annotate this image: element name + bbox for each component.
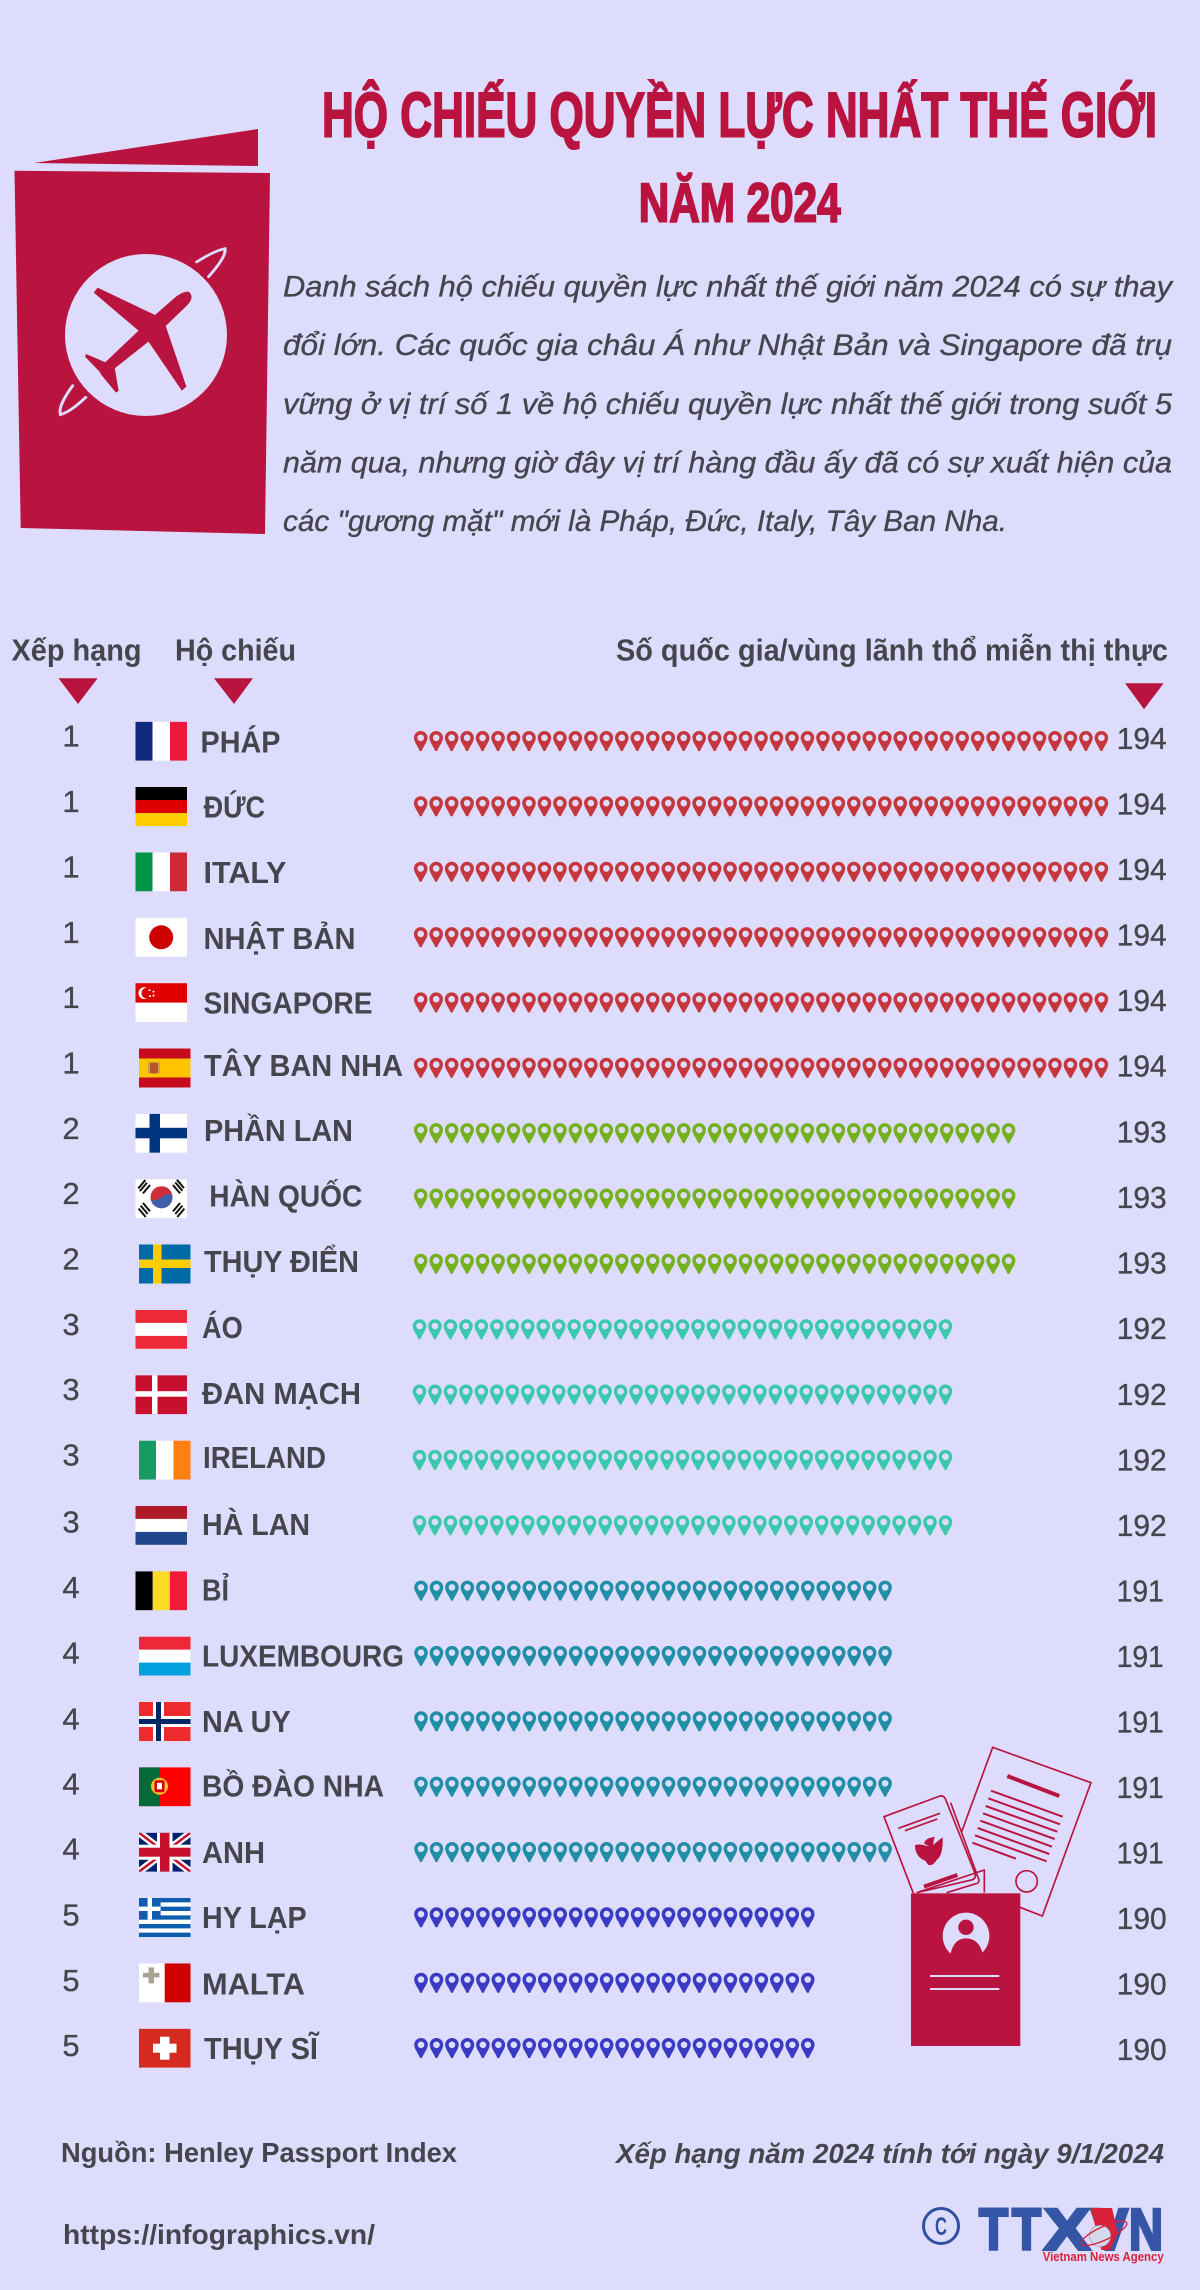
row: Nhật Bản: 194 [1117, 918, 1167, 952]
row: Luxembourg [62, 1636, 1164, 1676]
row: Nhật Bản: NHẬT BẢN [204, 920, 356, 956]
row: Anh: 4 [62, 1832, 80, 1867]
row: Ireland: 192 [1117, 1442, 1167, 1478]
row: Thụy Sĩ [62, 2028, 1167, 2068]
row: Bồ Đào Nha: 191 [1117, 1770, 1164, 1805]
row: Áo [62, 1307, 1167, 1349]
row: Malta: 190 [1117, 1966, 1167, 2002]
row: Pháp: PHÁP [200, 725, 280, 760]
row: Thụy Điển [62, 1242, 1167, 1284]
row: Anh: 191 [1117, 1836, 1164, 1870]
icon: passport with airplane [14, 129, 270, 534]
row: Đức: ĐỨC [204, 789, 265, 825]
row: Thụy Điển: 2 [62, 1242, 80, 1276]
row: Thụy Điển: 193 [1117, 1246, 1167, 1280]
row: Hà Lan: 192 [1117, 1508, 1167, 1543]
row: Hy Lạp: 5 [62, 1898, 80, 1933]
row: Italy: 194 [1117, 852, 1167, 887]
row: Áo: ÁO [202, 1310, 243, 1345]
row: Hà Lan: HÀ LAN [202, 1507, 310, 1542]
intro paragraph: các "gương mặt" mới là Pháp, Đức, Italy, Tây Ban Nha. [283, 505, 1007, 538]
table header: rank [12, 633, 142, 704]
row: Na Uy [62, 1702, 1164, 1741]
row: Phần Lan: PHẦN LAN [204, 1113, 353, 1148]
row: Thụy Sĩ: THỤY SĨ [204, 2031, 320, 2066]
row: Luxembourg: 191 [1117, 1639, 1164, 1674]
row: Phần Lan: 193 [1117, 1114, 1167, 1150]
row: Malta [62, 1963, 1167, 2002]
row: Đức: 1 [62, 784, 80, 819]
illustration: passports and documents [884, 1747, 1091, 2046]
copyright symbol [924, 2208, 958, 2244]
row: Pháp: 1 [62, 719, 80, 754]
intro paragraph: năm qua, nhưng giờ đây vị trí hàng đầu ấy đã có sự xuất hiện của [283, 447, 1172, 480]
row: Bỉ: BỈ [202, 1573, 229, 1608]
row: Tây Ban Nha [62, 1046, 1167, 1088]
row: Na Uy: NA UY [202, 1704, 291, 1739]
row: Singapore: 194 [1117, 983, 1167, 1018]
subtitle: NĂM 2024 [639, 172, 841, 234]
logo: TTXVN [979, 2198, 1164, 2264]
logo: TTXVN: Vietnam News Agency [1043, 2249, 1164, 2264]
row: Bồ Đào Nha: 4 [62, 1767, 80, 1802]
row: Đan Mạch: 3 [62, 1372, 80, 1407]
row: Anh: ANH [202, 1835, 265, 1870]
copyright symbol: C [935, 2213, 947, 2241]
row: Nhật Bản [62, 915, 1167, 957]
row: Đức [62, 784, 1167, 826]
row: Ireland: IRELAND [203, 1440, 326, 1475]
table header: visa-free count: Số quốc gia/vùng lãnh thổ miễn thị thực [616, 633, 1168, 668]
row: Singapore: 1 [62, 980, 80, 1015]
intro paragraph: đổi lớn. Các quốc gia châu Á như Nhật Bản và Singapore đã trụ [283, 329, 1172, 362]
row: Thụy Sĩ: 190 [1117, 2032, 1167, 2067]
row: Hàn Quốc: 2 [62, 1176, 80, 1211]
row: Bỉ: 4 [62, 1570, 80, 1605]
row: Tây Ban Nha: TÂY BAN NHA [204, 1047, 403, 1083]
row: Pháp [62, 719, 1167, 761]
row: Bồ Đào Nha: BỒ ĐÀO NHA [202, 1768, 384, 1804]
row: Pháp: 194 [1117, 721, 1167, 756]
row: Phần Lan: 2 [62, 1111, 80, 1146]
row: Luxembourg: 4 [62, 1636, 80, 1671]
row: Hy Lạp [62, 1898, 1167, 1937]
intro paragraph: Danh sách hộ chiếu quyền lực nhất thế giới năm 2024 có sự thay [283, 271, 1174, 304]
logo: TTXVN: T [1012, 2198, 1041, 2262]
row: Anh [62, 1832, 1164, 1872]
row: Luxembourg: LUXEMBOURG [202, 1638, 404, 1674]
intro paragraph [283, 271, 1174, 538]
row: Bỉ [62, 1570, 1164, 1610]
row: Malta: 5 [62, 1963, 80, 1998]
row: Italy [62, 849, 1167, 891]
row: Đan Mạch: 192 [1117, 1377, 1167, 1412]
table header: visa-free count [616, 633, 1168, 709]
logo: TTXVN: T [979, 2198, 1008, 2262]
row: Na Uy: 191 [1117, 1704, 1164, 1740]
row: Thụy Sĩ: 5 [62, 2028, 80, 2063]
row: Ireland [62, 1438, 1167, 1480]
row: Bồ Đào Nha [62, 1767, 1164, 1806]
row: Na Uy: 4 [62, 1702, 80, 1737]
row: Italy: 1 [62, 849, 80, 884]
row: Hàn Quốc: 193 [1117, 1180, 1167, 1215]
row: Hà Lan: 3 [62, 1504, 80, 1540]
source note: Nguồn: Henley Passport Index [61, 2137, 457, 2168]
row: Áo: 192 [1117, 1311, 1167, 1346]
row: Italy: ITALY [204, 855, 287, 890]
row: Ireland: 3 [62, 1438, 80, 1473]
row: Tây Ban Nha: 194 [1117, 1048, 1167, 1084]
row: Tây Ban Nha: 1 [62, 1046, 80, 1080]
row: Đan Mạch [62, 1372, 1167, 1414]
row: Áo: 3 [62, 1307, 80, 1342]
row: Singapore [62, 980, 1167, 1022]
table header: passport [175, 633, 296, 704]
row: Phần Lan [62, 1111, 1167, 1153]
row: Đan Mạch: ĐAN MẠCH [202, 1376, 361, 1411]
row: Hàn Quốc [62, 1176, 1167, 1218]
logo: TTXVN: V [1091, 2198, 1128, 2262]
row: Đức: 194 [1117, 786, 1167, 822]
date note: Xếp hạng năm 2024 tính tới ngày 9/1/2024 [614, 2138, 1164, 2169]
website url: https://infographics.vn/ [63, 2219, 375, 2250]
row: Hy Lạp: 190 [1117, 1901, 1167, 1936]
row: Malta: MALTA [202, 1966, 305, 2001]
logo: TTXVN: X [1044, 2198, 1090, 2262]
row: Hàn Quốc: HÀN QUỐC [209, 1178, 362, 1214]
row: Hy Lạp: HY LẠP [202, 1900, 307, 1935]
table header: rank: Xếp hạng [12, 633, 142, 668]
table header: passport: Hộ chiếu [175, 633, 296, 668]
row: Nhật Bản: 1 [62, 915, 80, 950]
intro paragraph: vững ở vị trí số 1 về hộ chiếu quyền lực nhất thế giới trong suốt 5 [283, 388, 1172, 421]
row: Singapore: SINGAPORE [204, 986, 372, 1020]
logo: TTXVN: N [1129, 2198, 1163, 2262]
row: Hà Lan [62, 1504, 1167, 1545]
row: Thụy Điển: THỤY ĐIỂN [204, 1244, 359, 1279]
row: Bỉ: 191 [1117, 1574, 1164, 1608]
